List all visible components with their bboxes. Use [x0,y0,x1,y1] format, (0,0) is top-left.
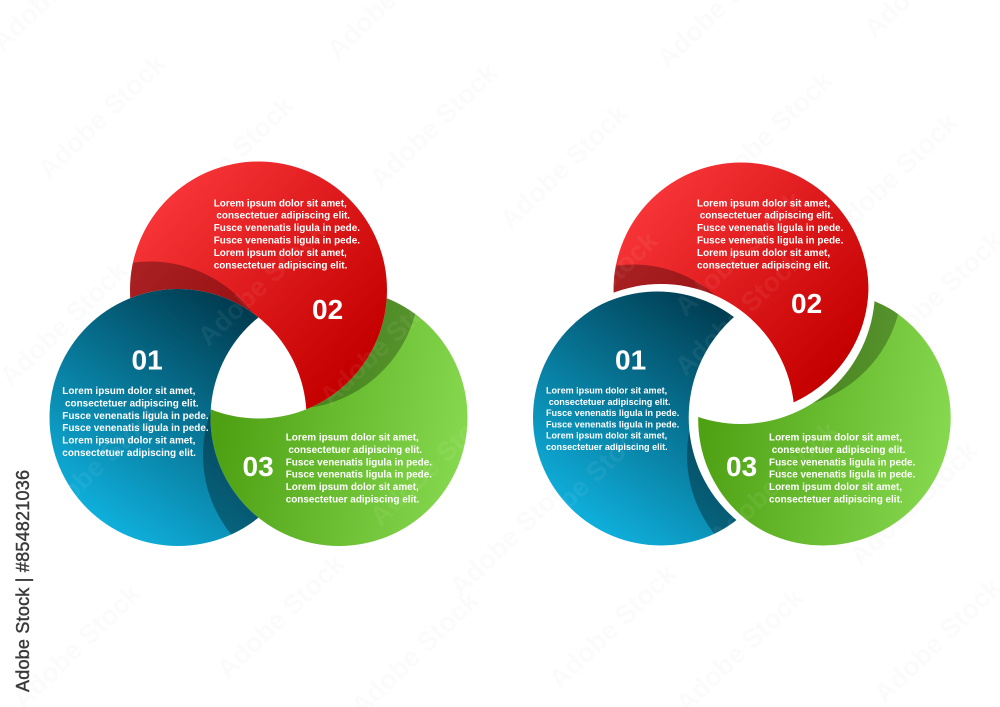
watermark: Adobe Stock over the coloured shapes: Adobe Stock [314,275,454,412]
segment 03: green [210,298,468,546]
text block 01: consectetuer adipiscing elit. [62,448,196,459]
text block 03: Lorem ipsum dolor sit amet, [286,432,419,444]
watermark: Adobe Stock background pattern: Adobe Stock [444,465,584,602]
watermark: Adobe Stock background pattern: Adobe Stock [844,435,984,572]
label 03 number: 03 [242,451,274,482]
text block 02: Lorem ipsum dolor sit amet, [214,248,347,259]
segment 02: red [130,162,387,410]
label 03 number: 03 [726,451,757,482]
text block 02: Lorem ipsum dolor sit amet, [214,198,347,209]
text block 01: consectetuer adipiscing elit. [549,397,670,407]
watermark: Adobe Stock over the coloured shapes: Adobe Stock [704,415,844,552]
text block 03: Fusce venenatis ligula in pede. [769,457,916,468]
watermark: Adobe Stock over the coloured shapes [29,185,844,552]
label 02 number: 02 [312,294,343,325]
watermark: Adobe Stock over the coloured shapes: Adobe Stock [669,185,809,322]
diagram: separated circles (right) [533,162,951,546]
text block 01: Fusce venenatis ligula in pede. [546,419,679,429]
text block 02: consectetuer adipiscing elit. [697,260,831,271]
text block 02: Lorem ipsum dolor sit amet, [697,248,830,259]
watermark: Adobe Stock over the coloured shapes: Adobe Stock [29,395,169,532]
text block 03: Fusce venenatis ligula in pede. [286,457,432,468]
text block 01: Lorem ipsum dolor sit amet, [62,436,196,447]
watermark: Adobe Stock background pattern: Adobe Stock [364,57,504,194]
text block 03: consectetuer adipiscing elit. [769,494,903,506]
side credit: Adobe Stock id: Adobe Stock | #854821036 [13,470,33,692]
text block 03: consectetuer adipiscing elit. [286,494,420,506]
text block 03: consectetuer adipiscing elit. [288,445,422,456]
segment 01: blue [533,292,736,546]
text block 02: Lorem ipsum dolor sit amet, [697,198,830,209]
text block 03: Fusce venenatis ligula in pede. [769,470,916,481]
text block 03: consectetuer adipiscing elit. [772,445,906,456]
text block 01: consectetuer adipiscing elit. [546,442,668,452]
text block 01: Lorem ipsum dolor sit amet, [546,386,667,396]
watermark: Adobe Stock over the coloured shapes: Adobe Stock [669,245,809,382]
label 01 number: 01 [615,344,646,376]
text block 01: Fusce venenatis ligula in pede. [546,408,679,418]
label 02 number: 02 [791,288,822,319]
text block 03: Fusce venenatis ligula in pede. [286,470,432,481]
watermark: Adobe Stock background pattern: Adobe Stock [543,558,683,695]
watermark: Adobe Stock over the coloured shapes: Adobe Stock [524,225,664,362]
watermark: Adobe Stock background pattern: Adobe Stock [494,98,634,235]
diagram: overlapping circles (left) [50,162,468,546]
text block 01: Lorem ipsum dolor sit amet, [546,431,667,441]
text block 03: Lorem ipsum dolor sit amet, [769,432,902,444]
label 01 number: 01 [132,344,163,376]
text block 02: consectetuer adipiscing elit. [214,260,348,271]
segment 02: red [614,162,868,402]
text block 03: Lorem ipsum dolor sit amet, [769,482,902,493]
text block 02: Fusce venenatis ligula in pede. [697,236,844,246]
text block 01: Fusce venenatis ligula in pede. [62,423,209,434]
text block 02: consectetuer adipiscing elit. [700,211,834,222]
text block 01: consectetuer adipiscing elit. [65,398,199,409]
text block 01: Lorem ipsum dolor sit amet, [62,386,196,397]
watermark: Adobe Stock over the coloured shapes: Adobe Stock [514,415,654,552]
text block 02: Fusce venenatis ligula in pede. [697,223,844,234]
watermark: Adobe Stock background pattern: Adobe Stock [160,90,300,227]
text block 02: Fusce venenatis ligula in pede. [214,223,360,234]
watermark: Adobe Stock over the coloured shapes: Adobe Stock [192,215,332,352]
watermark: Adobe Stock over the coloured shapes: Adobe Stock [364,395,504,532]
text block 01: Fusce venenatis ligula in pede. [62,411,209,422]
segment 01: blue [50,289,258,546]
watermark: Adobe Stock background pattern: Adobe Stock [824,107,964,244]
segment 03: green [698,301,951,546]
watermark: Adobe Stock background pattern: Adobe Stock [32,48,172,185]
text block 03: Lorem ipsum dolor sit amet, [286,482,419,493]
watermark: Adobe Stock background pattern: Adobe Stock [699,65,839,202]
watermark: Adobe Stock background pattern: Adobe Stock [211,548,351,685]
text block 02: consectetuer adipiscing elit. [216,211,350,222]
text block 02: Fusce venenatis ligula in pede. [214,236,360,246]
